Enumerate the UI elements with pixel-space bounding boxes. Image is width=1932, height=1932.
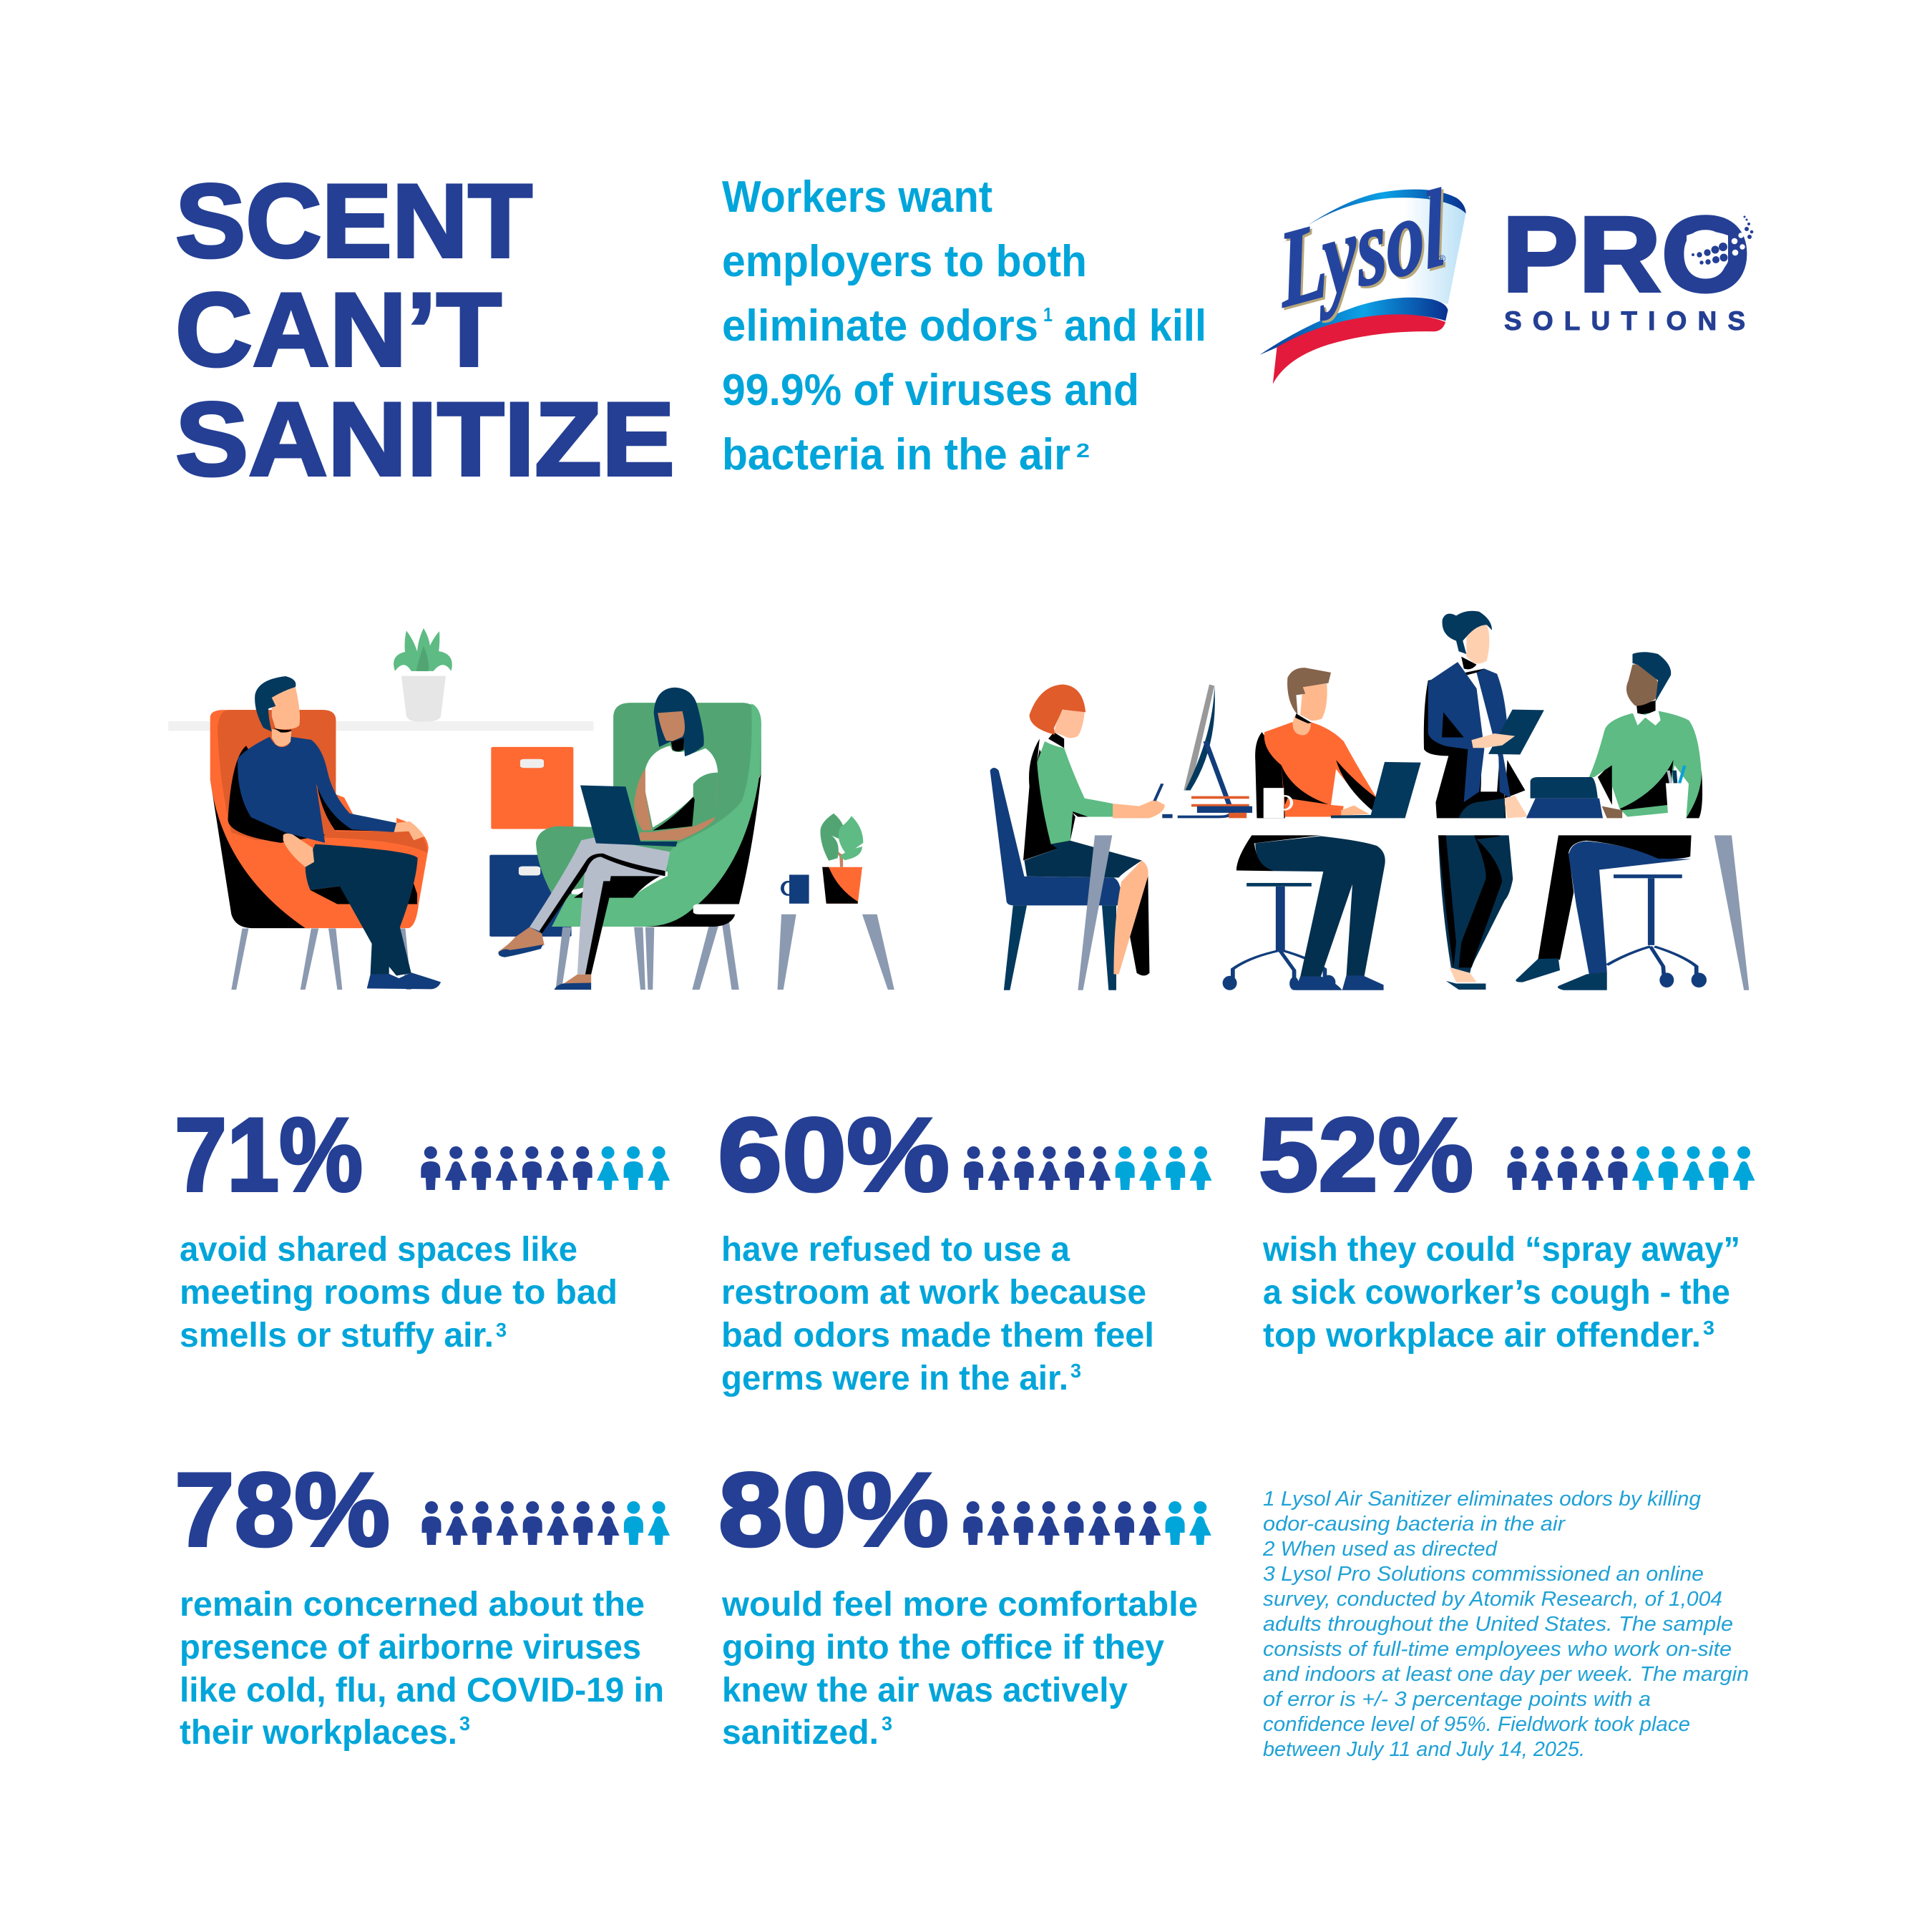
stat: 80% number: 80% [718,1451,949,1568]
stat: 71% description: avoid shared spaces like [180,1231,577,1269]
stat: 52% description: top workplace air offender. [1263,1317,1701,1355]
tablet on stand [1526,777,1603,818]
subtitle text block: 1 [1043,303,1053,326]
footnotes: 3 Lysol Pro Solutions commissioned an online [1263,1563,1704,1586]
stat: 78% description: their workplaces. [180,1714,457,1752]
subtitle text block: 99.9% of viruses and [722,366,1139,415]
pencil cup [1666,766,1688,818]
subtitle text block: Workers want [722,172,992,222]
desktop monitor [1162,685,1231,818]
man in orange sweater [1236,668,1421,871]
table legs [1078,835,1749,990]
green armchair [536,703,761,990]
subtitle text block: and kill [1064,301,1206,351]
footnotes: adults throughout the United States. The sample [1263,1613,1733,1636]
subtitle text block: eliminate odors [722,301,1038,351]
stat: 52% description: wish they could “spray away” [1262,1231,1740,1269]
stat: 78% number: 78% [175,1451,390,1568]
logo: PRO Solutions: PRO [1502,194,1750,314]
man in green sweater [1589,652,1702,818]
logo: PRO Solutions: SOLUTIONS [1504,306,1745,336]
icon: potted plant on shelf [394,628,452,722]
footnotes: 2 When used as directed [1262,1538,1498,1561]
logo: Lysol flag: Lysol [1276,168,1452,333]
footnotes: survey, conducted by Atomik Research, of 1,004 [1263,1588,1722,1611]
stat: 52% number: 52% [1259,1096,1473,1213]
seated woman with laptop [498,688,718,990]
stat: 71% people pictogram [421,1146,670,1190]
stat: 60% description: bad odors made them feel [721,1317,1154,1355]
stat: 60% description: 3 [1070,1360,1081,1382]
stat: 71% number: 71% [175,1096,363,1213]
orange armchair [210,710,429,990]
stat: 80% description [721,1586,1198,1752]
footnotes: 1 Lysol Air Sanitizer eliminates odors by killing [1263,1488,1701,1511]
title: CAN’T [175,271,502,388]
footnotes: and indoors at least one day per week. The margin [1263,1663,1749,1686]
footnotes: between July 11 and July 14, 2025. [1263,1738,1585,1761]
man's trousers and shoes [1255,836,1385,990]
subtitle text block: employers to both [722,237,1087,286]
subtitle text block [722,172,1206,479]
stat: 78% description: like cold, flu, and COVID-19 in [180,1672,664,1709]
footnotes: confidence level of 95%. Fieldwork took place [1263,1713,1690,1736]
footnotes: odor-causing bacteria in the air [1263,1513,1566,1536]
stat: 71% description: smells or stuffy air. [180,1317,494,1355]
navy storage box [489,855,572,937]
stat: 71% description [180,1231,618,1355]
stat: 71% description: 3 [496,1319,507,1341]
stat: 60% description [721,1231,1154,1397]
footnotes: consists of full-time employees who work on-site [1263,1638,1732,1661]
stat: 78% description [180,1586,664,1752]
logo: Lysol flag: Lysol [1274,166,1450,331]
stat: 80% description: sanitized. [722,1714,879,1752]
stat: 60% description: have refused to use a [721,1231,1070,1269]
stat: 52% description: 3 [1703,1317,1714,1339]
stat: 80% people pictogram [963,1501,1211,1545]
stat: 52% description [1262,1231,1740,1355]
illustration: office table with four people [990,611,1749,990]
subtitle text block: 2 [1076,439,1090,462]
orange storage box [491,747,573,829]
stat: 80% description: 3 [882,1712,892,1735]
stat: 80% description: going into the office if they [722,1629,1164,1667]
seated woman with red hair [990,685,1165,990]
footnotes: of error is +/- 3 percentage points with a [1263,1688,1651,1711]
stat: 60% description: germs were in the air. [721,1360,1068,1397]
shelf [168,721,594,731]
standing woman with tablet [1424,611,1544,990]
logo: Lysol flag [1259,166,1466,384]
stat: 52% description: a sick coworker’s cough - the [1263,1274,1730,1312]
stat: 78% people pictogram [422,1501,670,1545]
side table with mug and plant [693,814,894,990]
stool right [1607,874,1707,987]
title: SANITIZE [175,381,675,497]
logo: Lysol flag: ® [1438,253,1446,264]
stat: 78% description: presence of airborne viruses [180,1629,641,1667]
stool left [1223,883,1335,990]
footnotes [1262,1488,1749,1761]
stat: 71% description: meeting rooms due to bad [180,1274,618,1312]
book stack [1191,796,1252,818]
subtitle text block: bacteria in the air [722,430,1070,479]
stat: 80% description: would feel more comfortable [721,1586,1198,1624]
green sweater man's legs [1516,835,1692,990]
title [175,162,675,497]
stat: 60% description: restroom at work because [721,1274,1146,1312]
title: SCENT [175,162,532,279]
stat: 60% people pictogram [964,1146,1212,1190]
stat: 78% description: 3 [459,1712,470,1735]
stat: 78% description: remain concerned about the [180,1586,645,1624]
stat: 60% number: 60% [718,1096,950,1213]
stat: 52% people pictogram [1507,1146,1755,1190]
seated man [228,676,441,989]
illustration: lounge with two seated people [168,628,894,990]
stat: 80% description: knew the air was actively [722,1672,1128,1709]
